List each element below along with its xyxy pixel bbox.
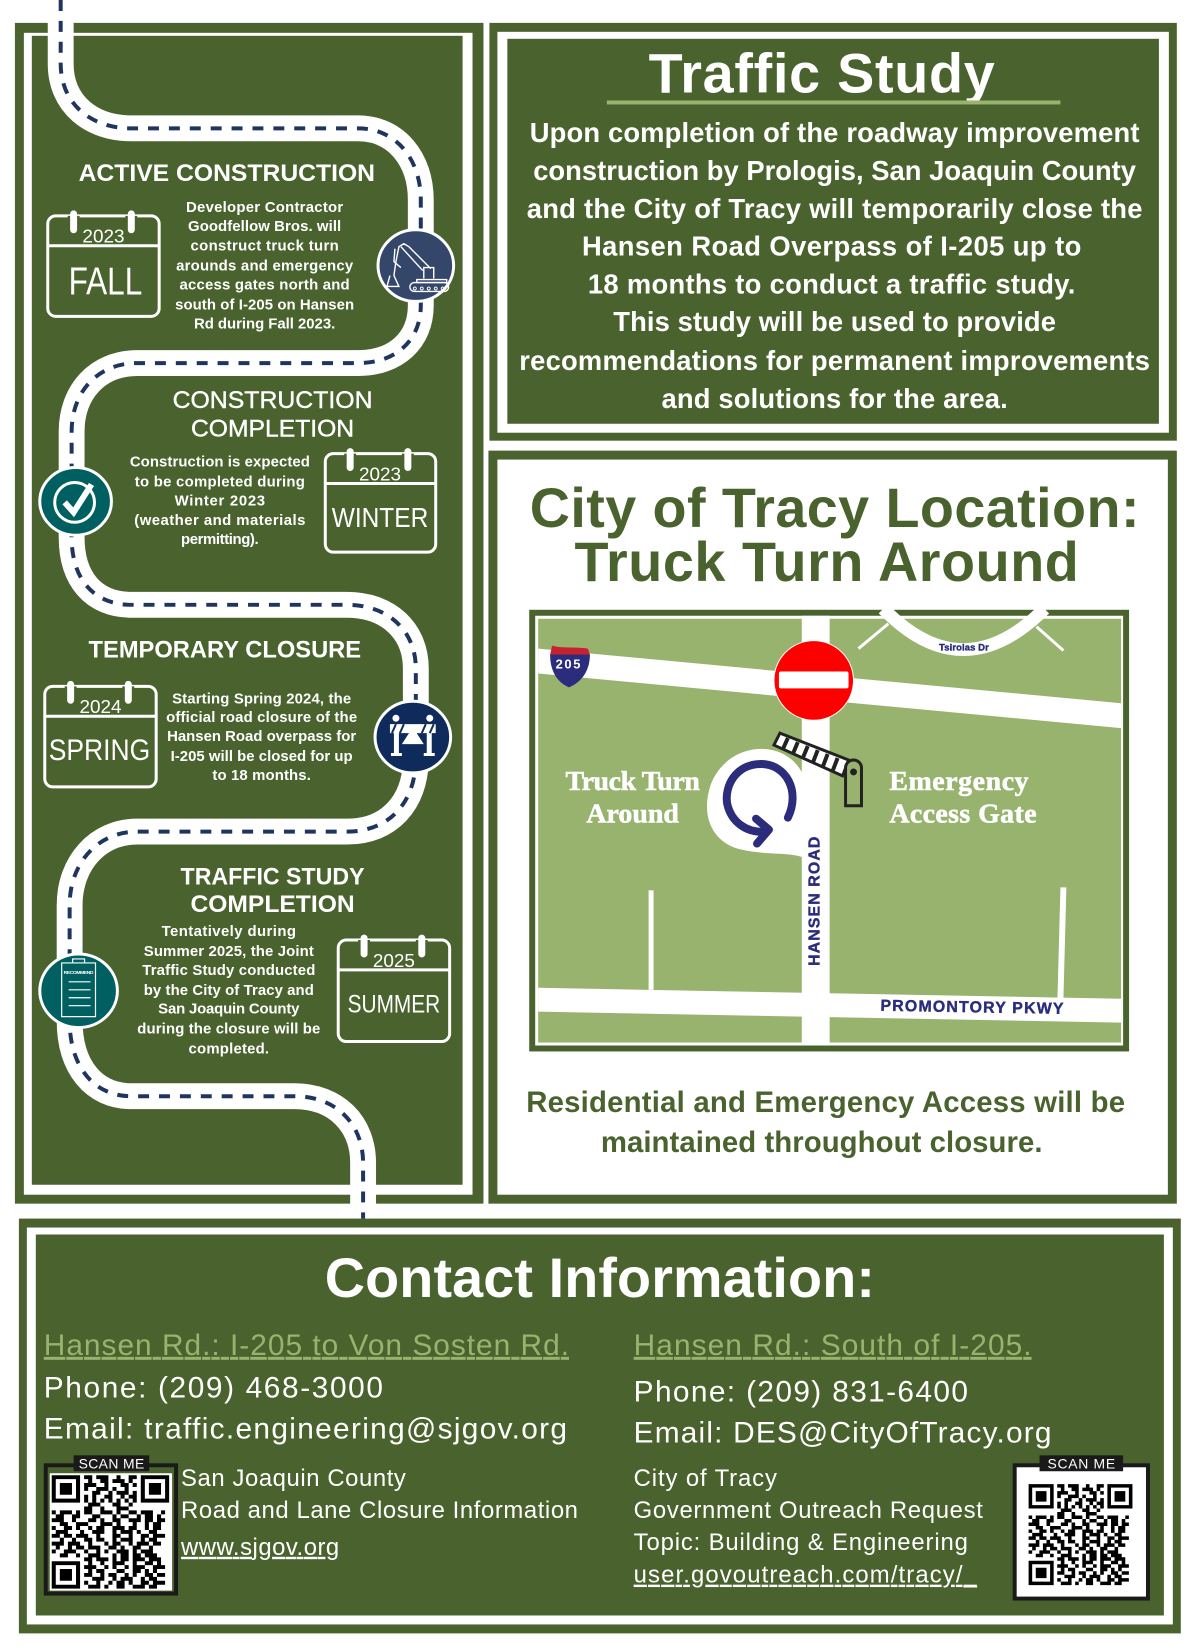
qr code: city of tracy [1015,1455,1148,1599]
roads [538,616,1121,1045]
contact: san joaquin county: San Joaquin County [181,1465,406,1492]
calendar: fall 2023 [48,214,159,316]
calendar: summer 2025 [338,938,450,1042]
icon: excavator [378,230,454,301]
icon: no entry sign [774,641,854,720]
text: active construction [79,160,375,332]
text: active construction: ACTIVE CONSTRUCTION [79,160,375,187]
contact: city of tracy: Email: DES@CityOfTracy.org [634,1416,1051,1449]
contact: city of tracy: user.govoutreach.com/tracy/_ [634,1562,978,1589]
heading: traffic study: Traffic Study [649,43,995,105]
text: construction completion [130,387,373,548]
contact: city of tracy: Hansen Rd.: South of I-205. [634,1329,1032,1362]
text: traffic study description: This study will be used to provide [613,306,1056,337]
text: construction completion: Winter 2023 [175,492,265,509]
text: construction completion: COMPLETION [191,416,354,443]
contact: san joaquin county: Hansen Rd.: I-205 to Von Sosten Rd. [44,1329,569,1362]
text: traffic study completion: by the City of Tracy and [144,982,314,999]
text: traffic study description: Hansen Road Overpass of I-205 up to [582,231,1081,262]
panel: city of tracy location [488,451,1177,1204]
text: traffic study description: recommendations for permanent improvements [519,345,1150,376]
text: traffic study completion: Traffic Study conducted [142,962,315,979]
contact: san joaquin county: Phone: (209) 468-3000 [44,1372,383,1405]
calendar: winter 2023 [325,452,436,552]
label: truck turn around: Around [586,799,679,830]
text: construction completion: to be completed during [135,473,305,490]
text: active construction: arounds and emergency [176,258,354,275]
label: emergency access gate: Emergency [889,766,1029,797]
contact: san joaquin county: Road and Lane Closure Information [181,1497,578,1524]
text: traffic study completion: during the closure will be [137,1021,320,1038]
icon: interstate 205 shield [550,646,590,687]
icon: clipboard: RECOMMEND [64,970,94,976]
heading: city of tracy location [530,477,1140,593]
icon: turn around arrow [727,764,793,844]
text: construction completion: Construction is expected [130,454,310,471]
text: active construction: Developer Contractor [186,199,343,216]
icon: interstate 205 shield: 205 [556,656,580,671]
qr code: city of tracy: SCAN ME [1048,1455,1115,1471]
text: access note: maintained throughout closure. [601,1126,1043,1159]
contact: san joaquin county: www.sjgov.org [180,1534,339,1561]
label: hansen road: HANSEN ROAD [807,837,824,966]
calendar: summer 2025: SUMMER [348,991,440,1019]
panel: project timeline [15,0,483,1219]
heading: city of tracy location: Truck Turn Around [574,531,1079,593]
text: traffic study description: Upon completion of the roadway improvement [530,117,1140,148]
label: truck turn around [566,766,700,830]
text: traffic study completion: Tentatively during [162,923,296,940]
calendar: summer 2025: 2025 [373,951,415,972]
contact: city of tracy: Government Outreach Request [634,1497,983,1524]
text: construction completion: (weather and materials [134,512,305,529]
text: traffic study description: 18 months to conduct a traffic study. [588,268,1075,299]
icon: check mark [40,468,111,535]
timeline road [61,0,421,1219]
text: temporary closure: Starting Spring 2024, the [172,690,351,707]
text: temporary closure: TEMPORARY CLOSURE [89,637,361,664]
text: active construction: Rd during Fall 2023. [194,315,335,332]
label: truck turn around: Truck Turn [566,766,700,797]
text: traffic study description [519,117,1150,414]
icon: emergency gate [774,733,861,806]
text: access note [526,1086,1125,1159]
label: emergency access gate: Access Gate [889,799,1037,830]
text: traffic study completion: COMPLETION [190,891,355,918]
text: active construction: construct truck turn [190,238,339,255]
panel: contact information [19,1219,1181,1633]
text: traffic study description: construction by Prologis, San Joaquin County [533,155,1137,186]
contact: city of tracy: Topic: Building & Engineering [634,1529,968,1556]
calendar: fall 2023: 2023 [82,227,124,248]
calendar: spring 2024 [45,684,156,787]
qr code: san joaquin county: SCAN ME [79,1455,144,1471]
calendar: fall 2023: FALL [69,260,142,303]
text: traffic study completion [137,863,365,1057]
text: temporary closure: official road closure of the [166,709,357,726]
text: traffic study completion: TRAFFIC STUDY [181,863,365,890]
icon: road barricade [375,701,451,773]
text: active construction: Goodfellow Bros. will [188,218,341,235]
text: construction completion: CONSTRUCTION [173,387,373,414]
text: access note: Residential and Emergency Access will be [526,1086,1125,1119]
icon: clipboard [40,954,117,1028]
contact: san joaquin county: Email: traffic.engineering@sjgov.org [44,1412,567,1445]
calendar: spring 2024: 2024 [79,697,121,718]
text: traffic study description: and the City of Tracy will temporarily close the [527,193,1143,224]
text: temporary closure: to 18 months. [212,767,311,784]
panel: traffic study [489,23,1177,441]
contact: city of tracy: Phone: (209) 831-6400 [634,1376,968,1409]
text: traffic study description: and solutions for the area. [662,383,1008,414]
text: temporary closure: I-205 will be closed for up [171,748,353,765]
text: traffic study completion: Summer 2025, the Joint [144,943,314,960]
label: emergency access gate [889,766,1037,830]
qr code: san joaquin county [46,1455,176,1594]
text: traffic study completion: San Joaquin County [158,1001,300,1018]
contact: city of tracy: City of Tracy [634,1465,777,1492]
calendar: spring 2024: SPRING [49,734,150,767]
heading: contact information: Contact Information: [325,1247,875,1309]
map [532,609,1126,1048]
heading: city of tracy location: City of Tracy Location: [530,477,1140,539]
calendar: winter 2023: WINTER [332,502,428,533]
text: construction completion: permitting). [181,531,259,548]
text: traffic study completion: completed. [189,1040,269,1057]
contact: san joaquin county [44,1329,578,1561]
text: temporary closure [89,637,361,784]
label: promontory pkwy: PROMONTORY PKWY [880,998,1064,1018]
text: temporary closure: Hansen Road overpass for [167,728,356,745]
contact: city of tracy [634,1329,1051,1589]
text: active construction: access gates north and [180,276,350,293]
turn around area [707,749,804,857]
calendar: winter 2023: 2023 [359,464,401,485]
label: tsirolas dr: Tsirolas Dr [939,643,989,654]
text: active construction: south of I-205 on Hansen [175,296,354,313]
